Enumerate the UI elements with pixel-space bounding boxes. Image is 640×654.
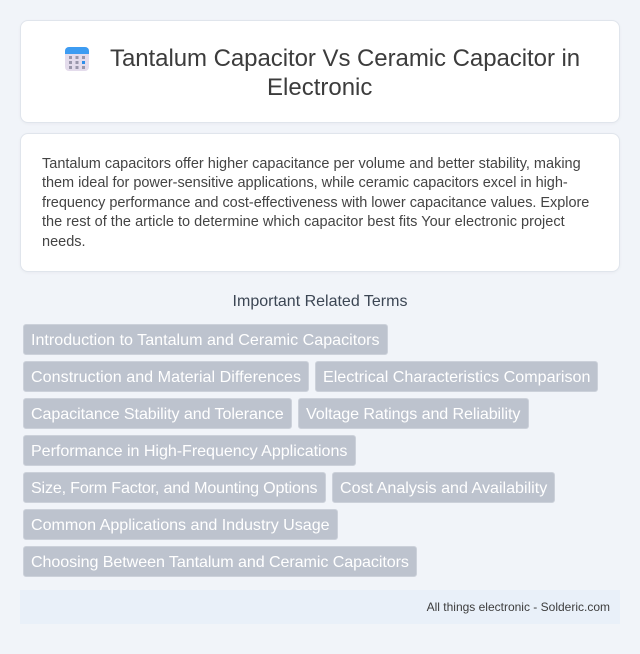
text block: introduction: the rest of the article to determine which capacitor best fits Your electronic project xyxy=(42,214,565,230)
tag xyxy=(23,435,356,466)
tag xyxy=(23,324,388,355)
tag xyxy=(315,361,598,392)
text block: introduction: needs. xyxy=(42,234,86,250)
icon: calendar grid xyxy=(65,47,89,71)
title xyxy=(110,45,580,101)
tag xyxy=(23,509,338,540)
text block: introduction: Tantalum capacitors offer higher capacitance per volume and better stability, making xyxy=(42,156,581,172)
panel: introduction xyxy=(20,133,620,272)
tag: Electrical Characteristics Comparison xyxy=(323,368,590,386)
tag: Construction and Material Differences xyxy=(31,368,301,386)
tag: Size, Form Factor, and Mounting Options xyxy=(31,479,317,497)
tag xyxy=(332,472,555,503)
text block: introduction: them ideal for power-sensitive applications, while ceramic capacitors excel in high- xyxy=(42,175,568,191)
tag: Introduction to Tantalum and Ceramic Capacitors xyxy=(31,331,380,349)
text block: introduction xyxy=(42,156,589,250)
tag xyxy=(23,546,417,577)
tag: Voltage Ratings and Reliability xyxy=(306,405,520,423)
tag: Cost Analysis and Availability xyxy=(340,479,547,497)
tag xyxy=(23,398,292,429)
tag xyxy=(23,472,326,503)
tag: Common Applications and Industry Usage xyxy=(31,516,330,534)
tag xyxy=(23,361,309,392)
panel: related term tags xyxy=(23,324,598,577)
heading: important related terms: Important Related Terms xyxy=(233,293,407,310)
panel: header xyxy=(20,20,620,123)
title: Electronic xyxy=(267,74,372,101)
tag: Capacitance Stability and Tolerance xyxy=(31,405,284,423)
text block: introduction: frequency performance and cost-effectiveness with lower capacitance values. Explore xyxy=(42,194,589,210)
footer credit: All things electronic - Solderic.com xyxy=(427,600,610,614)
tag: Performance in High-Frequency Applications xyxy=(31,442,347,460)
title: Tantalum Capacitor Vs Ceramic Capacitor in xyxy=(110,45,580,72)
tag: Choosing Between Tantalum and Ceramic Capacitors xyxy=(31,553,409,571)
footer bar xyxy=(20,590,620,624)
tag xyxy=(298,398,529,429)
